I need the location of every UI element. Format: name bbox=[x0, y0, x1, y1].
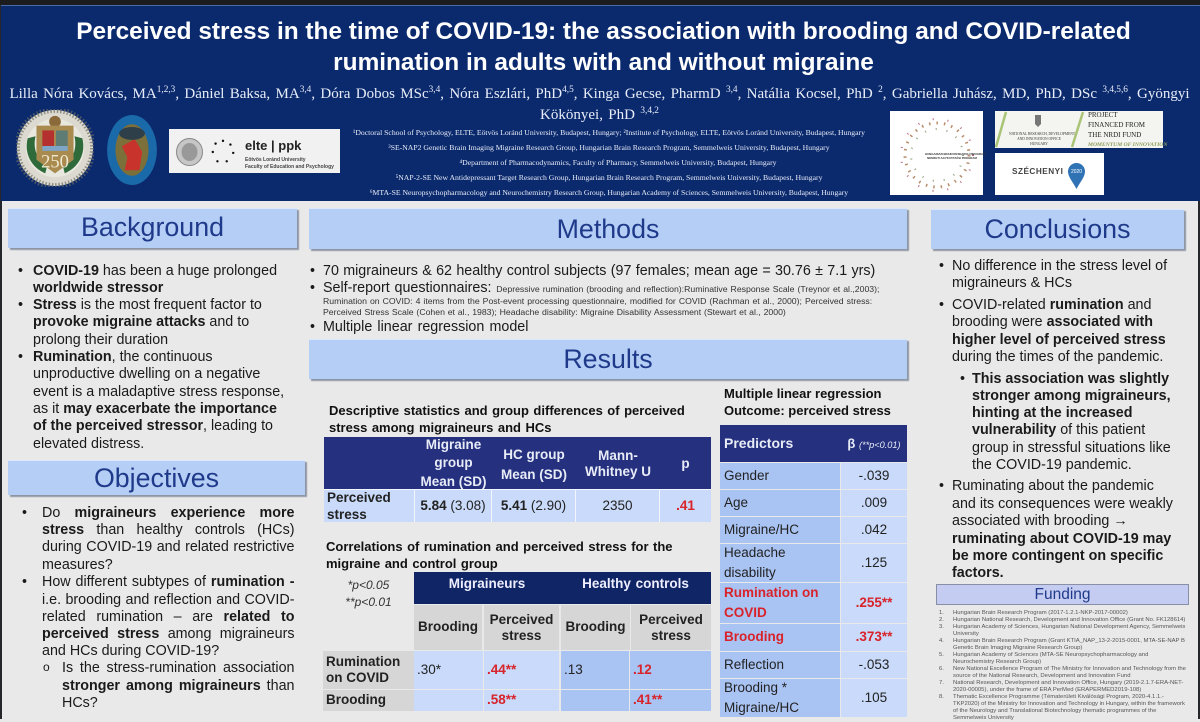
row: rumination on COVID bbox=[323, 651, 711, 689]
row: brooding: Brooding bbox=[724, 629, 784, 644]
bullet text: as it may exacerbate the importance bbox=[33, 400, 277, 416]
bullet text: provoke migraine attacks and to bbox=[33, 314, 249, 330]
logo text: elte | ppk bbox=[245, 138, 301, 153]
significance note: **p<0.01 bbox=[345, 595, 392, 609]
bullet text: • bbox=[18, 296, 23, 312]
affiliations: ⁶MTA-SE Neuropsychopharmacology and Neurochemistry Research Group, Hungarian Academy of Sciences, Semmelweis University, Budapest, Hungary bbox=[370, 188, 848, 197]
title bbox=[76, 18, 1131, 76]
table title: stress among migraineurs and HCs bbox=[329, 420, 552, 434]
panel: methods text: • bbox=[310, 319, 315, 335]
row: rumination on COVID: .255** bbox=[856, 595, 892, 610]
fund text: THE NRDI FUND bbox=[1088, 131, 1141, 139]
conclusions text: vulnerability of this patient bbox=[972, 422, 1145, 438]
icon: Semmelweis University seal: 250 bbox=[41, 151, 69, 172]
funding list: 4. bbox=[939, 638, 944, 644]
group header bbox=[414, 572, 711, 604]
panel: methods text: 70 migraineurs & 62 healthy control subjects (97 females; mean age = 30.76 ± 7.1 yrs) bbox=[323, 263, 875, 279]
row: headache disability: Headache bbox=[724, 545, 786, 560]
heading: funding bbox=[936, 584, 1189, 605]
conclusions text: stronger among migraineurs, bbox=[972, 388, 1171, 404]
conclusions text bbox=[939, 258, 1173, 581]
logo: ELTE PPK bbox=[169, 129, 340, 173]
logo: brain research program bbox=[890, 111, 983, 195]
panel: methods text: • bbox=[310, 280, 315, 296]
logo text: SZÉCHENYI bbox=[1012, 167, 1063, 176]
panel: methods text: Self-report questionnaires: Depressive rumination (brooding and reflection):Ruminative Response Scale (Treynor et al.,2003); bbox=[323, 280, 879, 296]
table header row bbox=[720, 425, 907, 462]
funding list: Hungarian Academy of Sciences (MTA-SE Neuropsychopharmacology and bbox=[953, 652, 1148, 658]
row: rumination on COVID: COVID bbox=[724, 605, 767, 620]
sub header: Brooding bbox=[566, 619, 626, 634]
row: migraine/HC: .042 bbox=[861, 522, 887, 537]
bullet text: • bbox=[18, 262, 23, 278]
group header: Migraineurs bbox=[449, 576, 525, 591]
panel: methods text: • bbox=[310, 263, 315, 279]
authors: Lilla Nóra Kovács, MA1,2,3, Dániel Baksa, MA3,4, Dóra Dobos MSc3,4, Nóra Eszlári, PhD4,5, Kinga Gecse, PharmD 3,4, Natália Kocsel, PhD 2, Gabriella Juhász, MD, PhD, DSc 3,4,5,6, Gyöngyi bbox=[9, 85, 1190, 102]
bullet text: Stress is the most frequent factor to bbox=[33, 296, 262, 312]
bullet text: • bbox=[22, 504, 27, 520]
bullet text: • bbox=[18, 348, 23, 364]
row: age bbox=[720, 490, 907, 516]
funding list: Hungarian Brain Research Program (Grant KTIA_NAP_13-2-2015-0001, MTA-SE-NAP B bbox=[953, 638, 1185, 644]
conclusions text: This association was slightly bbox=[972, 370, 1169, 386]
row: brooding x migraine/HC bbox=[720, 679, 907, 717]
bullet text: measures? bbox=[42, 557, 113, 573]
heading: methods: Methods bbox=[557, 214, 659, 244]
table header row bbox=[324, 437, 711, 489]
conclusions text: and its consequences were weakly bbox=[952, 496, 1173, 512]
funding list: of the Neurology and Translational Biotechnology thematic programmes of the bbox=[953, 708, 1156, 714]
logo caption: HUNGARIAN BRAIN RESEARCH PROGRAM bbox=[925, 152, 986, 156]
funding list: 6. bbox=[939, 666, 944, 672]
icon: Academy of Sciences oval seal bbox=[107, 115, 157, 185]
row: reflection: -.053 bbox=[859, 657, 889, 672]
row: brooding: .58** bbox=[487, 692, 516, 707]
icon: dotted ring bbox=[900, 118, 974, 192]
bullet text: worldwide stressor bbox=[33, 280, 163, 296]
heading: objectives: Objectives bbox=[94, 462, 219, 492]
table header row: HC group bbox=[503, 446, 565, 462]
table title: Correlations of rumination and perceived stress for the bbox=[326, 539, 673, 554]
funding list bbox=[938, 611, 1190, 719]
row: reflection: Reflection bbox=[724, 657, 784, 672]
bullet text: HCs? bbox=[62, 695, 98, 711]
panel: methods text: Perceived Stress Scale (Cohen et al., 1983); Headache disability: Migraine Disability Assessment (Stewart et al., 2000) bbox=[323, 307, 786, 317]
bullet text bbox=[18, 262, 284, 452]
heading: results bbox=[309, 339, 907, 379]
row: headache disability bbox=[720, 544, 907, 582]
icon: map pin bbox=[1068, 163, 1085, 189]
affiliations: ³SE-NAP2 Genetic Brain Imaging Migraine Research Group, Hungarian Brain Research Program, Semmelweis University, Budapest, Hungary bbox=[388, 143, 830, 152]
funding list: New National Excellence Program of The Ministry for Innovation and Technology from the bbox=[953, 666, 1186, 672]
sub header: stress bbox=[502, 628, 541, 642]
table data row: 5.84 (3.08) bbox=[420, 498, 486, 513]
heading: results: Results bbox=[563, 344, 653, 374]
table title bbox=[724, 386, 891, 418]
heading: objectives bbox=[8, 460, 305, 495]
logo caption bbox=[245, 157, 334, 170]
funding list: 3. bbox=[939, 624, 944, 630]
logo caption bbox=[1009, 132, 1075, 146]
table title bbox=[329, 403, 685, 434]
affiliations bbox=[353, 128, 865, 197]
funding list: Hungarian National Research, Development and Innovation Office (Grant No. FK128614) bbox=[953, 617, 1185, 623]
row: brooding bbox=[323, 690, 711, 711]
affiliations: ⁵NAP-2-SE New Antidepressant Target Research Group, Hungarian Brain Research Program, Semmelweis University, Budapest, Hungary bbox=[396, 173, 822, 182]
funding list: 8. bbox=[939, 694, 944, 700]
row: age: Age bbox=[724, 495, 748, 510]
table title: Descriptive statistics and group differences of perceived bbox=[329, 403, 685, 418]
row: gender: -.039 bbox=[859, 468, 889, 483]
funding list: 1. bbox=[939, 610, 944, 616]
fund text: FINANCED FROM bbox=[1088, 121, 1145, 129]
panel: methods text: Multiple linear regression model bbox=[323, 319, 528, 335]
left dark edge bbox=[0, 5, 2, 719]
table header row: Whitney U bbox=[585, 464, 651, 478]
funding list: Neurochemistry Research Group) bbox=[953, 659, 1041, 665]
panel: descriptive statistics table bbox=[324, 403, 711, 522]
bullet text: COVID-19 has been a huge prolonged bbox=[33, 262, 277, 278]
sub header: stress bbox=[651, 628, 691, 642]
affiliations: ¹Doctoral School of Psychology, ELTE, Eötvös Loránd University, Budapest, Hungary; ²Institute of Psychology, ELTE, Eötvös Loránd University, Budapest, Hungary bbox=[353, 128, 865, 137]
panel: background bbox=[8, 208, 300, 452]
funding list: National Research, Development and Innovation Office, Hungary (2019-2.1.7-ERA-NET- bbox=[953, 680, 1183, 686]
authors bbox=[9, 85, 1190, 123]
bullet text: and HCs during COVID-19? bbox=[42, 643, 219, 659]
table header row: Migraine bbox=[426, 437, 481, 452]
row: migraine/HC bbox=[720, 517, 907, 543]
row: rumination on COVID: .12 bbox=[633, 662, 652, 677]
icon: ELTE dots bbox=[212, 140, 234, 162]
panel: methods text: Rumination on COVID: 4 items from the Post-event processing questionnaire, modified for COVID (Rachman et al., 2000); Perceived stress: bbox=[323, 296, 872, 306]
logo caption: Faculty of Education and Psychology bbox=[245, 164, 334, 170]
decorative green stripes bbox=[995, 112, 1084, 148]
funding list: Genetic Brain Imaging Migraine Research Group) bbox=[953, 645, 1082, 651]
icon: Semmelweis University seal bbox=[16, 109, 94, 187]
funding list: University bbox=[953, 631, 979, 637]
logo caption: AND INNOVATION OFFICE bbox=[1017, 137, 1061, 141]
table header row: Mean (SD) bbox=[501, 466, 567, 482]
table data row: stress bbox=[327, 507, 367, 522]
heading: funding: Funding bbox=[1034, 586, 1090, 602]
funding list: 2. bbox=[939, 617, 944, 623]
funding list: source of the National Research, Development and Innovation Fund bbox=[953, 673, 1130, 679]
table title: Multiple linear regression bbox=[724, 386, 882, 401]
fund text bbox=[1088, 111, 1168, 148]
heading: conclusions bbox=[931, 209, 1184, 249]
fund text: MOMENTUM OF INNOVATION bbox=[1088, 142, 1167, 148]
panel: methods text bbox=[310, 263, 879, 335]
row: headache disability: .125 bbox=[861, 555, 887, 570]
row: reflection bbox=[720, 652, 907, 678]
logo caption: Eötvös Loránd University bbox=[245, 157, 306, 163]
table data row: Perceived bbox=[327, 490, 391, 505]
title: rumination in adults with and without migraine bbox=[333, 49, 874, 76]
conclusions text: COVID-related rumination and bbox=[952, 297, 1151, 313]
icon: map pin: 2020 bbox=[1071, 169, 1082, 175]
conclusions text: ruminating about COVID-19 may bbox=[952, 530, 1171, 546]
bullet text bbox=[22, 504, 294, 711]
table data row: 5.41 (2.90) bbox=[501, 498, 566, 513]
table data row: 2350 bbox=[602, 498, 633, 513]
table header row: Predictors bbox=[724, 435, 793, 451]
panel: funding bbox=[936, 584, 1189, 721]
table header row: p bbox=[681, 456, 690, 471]
bullet text: elevated distress. bbox=[33, 436, 144, 452]
heading: background: Background bbox=[81, 212, 224, 242]
conclusions text: hinting at the increased bbox=[972, 405, 1132, 421]
table data row bbox=[324, 489, 711, 522]
row: gender: Gender bbox=[724, 468, 769, 483]
conclusions text: group in stressful situations like bbox=[972, 440, 1171, 456]
logo caption: NATIONAL RESEARCH, DEVELOPMENT bbox=[1009, 132, 1075, 136]
authors: Kökönyei, PhD 3,4,2 bbox=[540, 106, 659, 123]
row: rumination on COVID: .13 bbox=[564, 662, 583, 677]
significance note bbox=[345, 578, 392, 609]
row: rumination on COVID: Rumination bbox=[326, 654, 400, 668]
fund text: PROJECT bbox=[1088, 111, 1118, 119]
bullet text: prolong their duration bbox=[33, 332, 168, 348]
sub header bbox=[414, 605, 711, 650]
row: brooding: .41** bbox=[633, 692, 662, 707]
conclusions text: • bbox=[939, 297, 944, 313]
funding list: 2020-00005), under the frame of ERA PerMed (ERAPERMED2019-108) bbox=[953, 687, 1141, 693]
bullet text: unproductive dwelling on a negative bbox=[33, 366, 260, 382]
logo: NRDI fund bbox=[995, 111, 1163, 148]
bullet text: Rumination, the continuous bbox=[33, 348, 213, 364]
heading: background bbox=[8, 208, 297, 248]
sub header: Perceived bbox=[639, 612, 703, 626]
conclusions text: associated with brooding → bbox=[952, 513, 1128, 529]
funding list: Semmelweis University bbox=[953, 715, 1014, 721]
conclusions text: the COVID-19 pandemic. bbox=[972, 457, 1132, 473]
panel: regression table bbox=[720, 386, 907, 717]
funding list: Thematic Excellence Programme (Tématerületi Kiválósági Program, 2020-4.1.1.- bbox=[953, 694, 1164, 700]
row: rumination on COVID: on COVID bbox=[326, 670, 389, 685]
right dark edge bbox=[1198, 201, 1200, 719]
row: rumination on COVID bbox=[720, 583, 907, 623]
header banner bbox=[1, 5, 1200, 201]
logo caption: NEMZETI AGYKUTATÁSI PROGRAM bbox=[927, 156, 977, 160]
conclusions text: factors. bbox=[952, 565, 1004, 581]
conclusions text: No difference in the stress level of bbox=[952, 258, 1167, 274]
row: age: .009 bbox=[861, 495, 887, 510]
table header row: Mann- bbox=[598, 448, 638, 462]
row: brooding bbox=[720, 624, 907, 651]
row: rumination on COVID: .44** bbox=[487, 662, 516, 677]
row: gender bbox=[720, 463, 907, 489]
affiliations: ⁴Department of Pharmacodynamics, Faculty of Pharmacy, Semmelweis University, Budapest, Hungary bbox=[459, 158, 776, 167]
panel: objectives bbox=[8, 460, 308, 711]
funding list: Hungarian Brain Research Program (2017-1.2.1-NKP-2017-00002) bbox=[953, 610, 1128, 616]
table data row: .41 bbox=[676, 498, 695, 513]
funding list: TKP2020) of the Ministry for Innovation and Technology in Hungary, within the framework bbox=[953, 701, 1185, 707]
funding list: 7. bbox=[939, 680, 944, 686]
heading: conclusions: Conclusions bbox=[984, 214, 1130, 244]
conclusions text: Ruminating about the pandemic bbox=[952, 478, 1154, 494]
table title bbox=[326, 539, 673, 570]
funding list: 5. bbox=[939, 652, 944, 658]
row: brooding x migraine/HC: .105 bbox=[861, 690, 887, 705]
row: brooding x migraine/HC: Brooding * bbox=[724, 680, 787, 695]
significance note: *p<0.05 bbox=[348, 578, 389, 592]
row: brooding x migraine/HC: Migraine/HC bbox=[724, 700, 799, 715]
conclusions text: higher level of perceived stress bbox=[952, 332, 1166, 348]
top dark strip bbox=[0, 0, 1200, 5]
heading: methods bbox=[309, 208, 907, 249]
conclusions text: • bbox=[939, 258, 944, 274]
panel: correlations table bbox=[323, 539, 711, 711]
table header row: Mean (SD) bbox=[420, 474, 486, 489]
table header row: β (**p<0.01) bbox=[847, 436, 901, 451]
row: brooding: .373** bbox=[856, 629, 892, 644]
row: rumination on COVID: .30* bbox=[417, 662, 441, 677]
conclusions text: migraineurs & HCs bbox=[952, 275, 1072, 291]
logo: Széchenyi 2020 bbox=[995, 153, 1104, 195]
row: headache disability: disability bbox=[724, 565, 776, 580]
title: Perceived stress in the time of COVID-19: the association with brooding and COVID-related bbox=[76, 18, 1131, 45]
icon: ELTE seal bbox=[176, 138, 203, 166]
conclusions text: be more contingent on specific bbox=[952, 548, 1163, 564]
conclusions text: • bbox=[939, 478, 944, 494]
conclusions text: • bbox=[960, 370, 965, 386]
row: migraine/HC: Migraine/HC bbox=[724, 522, 799, 537]
group header: Healthy controls bbox=[582, 576, 689, 591]
bullet text: of the perceived stressor, leading to bbox=[33, 418, 273, 434]
logo caption: HUNGARY bbox=[1030, 142, 1048, 146]
funding list: Hungarian Academy of Sciences, Hungarian National Development Agency, Semmelweis bbox=[953, 624, 1185, 630]
sub header: Brooding bbox=[418, 619, 478, 634]
bullet text: o bbox=[43, 660, 50, 674]
sub header: Perceived bbox=[490, 612, 553, 626]
bullet text: event is a maladaptive stress response, bbox=[33, 384, 284, 400]
conclusions text: during the times of the pandemic. bbox=[952, 349, 1163, 365]
logo caption bbox=[925, 152, 986, 160]
bullet text: • bbox=[22, 574, 27, 590]
table header row: group bbox=[434, 455, 473, 470]
table title: Outcome: perceived stress bbox=[724, 402, 891, 418]
row: rumination on COVID: Rumination on bbox=[724, 585, 818, 600]
table title: migraine and control group bbox=[326, 556, 498, 570]
row: brooding: Brooding bbox=[326, 692, 386, 707]
panel: conclusions bbox=[931, 209, 1186, 581]
conclusions text: brooding were associated with bbox=[952, 314, 1153, 330]
